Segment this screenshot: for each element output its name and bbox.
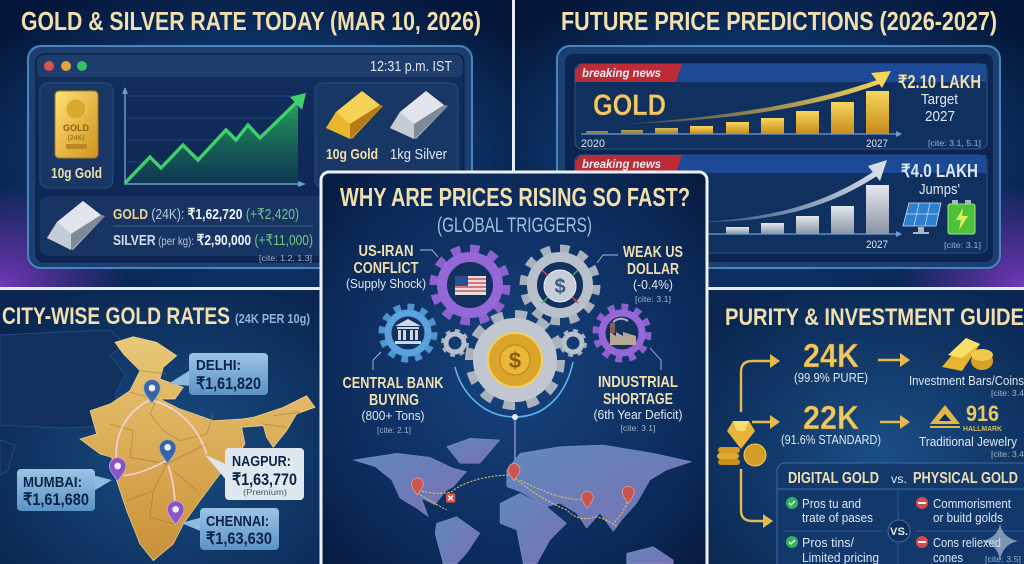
label: central bank buying: [342, 375, 444, 435]
citation: [cite: 1.2, 1.3]: [259, 254, 312, 263]
card: 10g gold bar: GOLD: [63, 123, 89, 133]
icon: gold bar and coins: [942, 338, 993, 371]
callout: Mumbai: MUMBAI:: [23, 474, 82, 491]
icon: factory: [610, 319, 636, 345]
digital gold pros: Pros tins/: [802, 535, 854, 550]
table header: [788, 470, 1018, 487]
dollar sign: $: [509, 348, 521, 373]
silver target: ₹4.0 LAKH: [901, 161, 978, 181]
gear: weak US dollar: [524, 249, 596, 321]
comparison table: [777, 463, 1024, 564]
label: industrial shortage: [594, 374, 682, 433]
gold forecast chart: [575, 64, 987, 150]
physical gold cons: or buitd golds: [933, 510, 1003, 525]
table header: vs.: [891, 472, 907, 486]
physical gold cons: [cite: 3.5]: [985, 555, 1021, 564]
silver ingot: [390, 91, 448, 139]
small gears: [443, 331, 585, 355]
label: US-Iran conflict: CONFLICT: [354, 260, 419, 277]
icon: battery: [948, 200, 975, 234]
physical gold cons: Commorisment: [933, 496, 1011, 511]
world map: [353, 438, 692, 564]
card: 10g gold bar: (24K): [67, 135, 85, 142]
label: industrial shortage: INDUSTRIAL: [598, 374, 678, 391]
panel: why are prices rising: [321, 172, 707, 564]
icon: 916 hallmark: HALLMARK: [963, 426, 1002, 433]
heading: why prices rising: WHY ARE PRICES RISING SO FAST?: [340, 182, 690, 212]
gear: US-Iran conflict: [434, 249, 506, 321]
card: gold and silver ingots: 1kg Silver: [390, 146, 447, 163]
heading: city rates: CITY-WISE GOLD RATES: [2, 303, 230, 330]
silver ingot: [47, 201, 105, 250]
trade routes: [418, 475, 628, 527]
callout: Delhi: [168, 353, 268, 395]
gold price row: GOLD (24K): ₹1,62,720 (+₹2,420): [113, 206, 299, 223]
icon: gold diamond and coins: [717, 421, 766, 466]
window control dots: [44, 61, 87, 71]
silver forecast chart: [cite: 3.1]: [944, 241, 981, 250]
panel: future price predictions: [513, 0, 1024, 287]
VS badge: [888, 520, 910, 542]
icon: 916 hallmark: 916: [966, 401, 999, 426]
subheading: global triggers: (GLOBAL TRIGGERS): [437, 214, 592, 237]
gold forecast chart: 2020: [581, 138, 605, 150]
label: weak US dollar: WEAK US: [623, 244, 683, 261]
investment bars label: [909, 373, 1024, 398]
purity: 22K: (91.6% STANDARD): [781, 432, 881, 447]
breaking news tag: [575, 64, 682, 82]
silver forecast chart: Jumps': [919, 181, 960, 198]
label: weak US dollar: DOLLAR: [627, 261, 679, 278]
digital gold pros: Pros tu and: [802, 496, 861, 511]
digital gold pros: [786, 496, 879, 564]
label: central bank buying: (800+ Tons): [362, 408, 424, 423]
label: central bank buying: CENTRAL BANK: [342, 375, 444, 392]
traditional jewelry label: [cite: 3.4: [991, 450, 1024, 459]
label: weak US dollar: [623, 244, 683, 304]
panel: gold and silver rate today: [0, 0, 513, 287]
label: US-Iran conflict: US-IRAN: [358, 243, 414, 260]
breaking news tag: [575, 155, 682, 173]
investment bars label: [cite: 3.4: [991, 389, 1024, 398]
physical gold cons: [916, 496, 1021, 564]
silver trend arrow: [700, 160, 887, 222]
callout: Nagpur: ₹1,63,770: [232, 470, 297, 489]
gold label: GOLD: [593, 89, 666, 122]
silver bars: [726, 185, 889, 234]
gear: industrial shortage: [596, 307, 648, 359]
purity: 22K: 22K: [803, 399, 859, 436]
label: weak US dollar: (-0.4%): [633, 277, 673, 292]
label: central bank buying: [cite: 2.1]: [377, 426, 411, 435]
label: industrial shortage: [cite: 3.1]: [620, 424, 656, 433]
gold ingot: [326, 91, 383, 139]
arrowheads: [763, 353, 910, 528]
disruption marker: [446, 493, 455, 503]
gold forecast chart: [cite: 3.1, 5.1]: [928, 139, 981, 148]
gold forecast chart: 2027: [866, 138, 888, 150]
label: industrial shortage: SHORTAGE: [603, 391, 673, 408]
callout: Chennai: CHENNAI:: [206, 513, 269, 530]
gear: central bank: [382, 307, 434, 359]
silver forecast chart: 2027: [866, 239, 888, 251]
callout: Nagpur: [205, 448, 304, 500]
gold trend arrow: [625, 71, 891, 124]
white dividers: [0, 0, 1024, 290]
digital gold pros: trate of pases: [802, 510, 873, 525]
panel: purity and investment guide: [707, 290, 1024, 564]
card: gold and silver ingots: 10g Gold: [326, 146, 378, 163]
silver price row: SILVER (per kg): ₹2,90,000 (+₹11,000): [113, 232, 313, 249]
map pins: [411, 464, 634, 508]
leader lines: [373, 250, 661, 370]
pin: Delhi: [144, 380, 160, 403]
gold branching arrows: [741, 360, 902, 521]
icon: bank building: [395, 319, 421, 344]
physical gold cons: Cons reliexed: [933, 535, 1001, 550]
callout: Mumbai: [17, 469, 112, 511]
icon: solar panel: [903, 203, 941, 234]
callout: Delhi: ₹1,61,820: [196, 374, 261, 393]
neighbouring countries: [0, 330, 130, 475]
predictions window: [557, 46, 1000, 268]
silver forecast chart: [575, 155, 987, 253]
heading: rate today: GOLD & SILVER RATE TODAY (MAR 10, 2026): [21, 6, 481, 36]
timestamp: 12:31 p.m. IST: [370, 58, 452, 75]
breaking news tag: breaking news: [582, 66, 661, 80]
label: US-Iran conflict: [346, 243, 426, 291]
gold bars: [586, 91, 889, 134]
gold forecast chart: 2027: [925, 108, 955, 125]
card: 10g gold bar: [40, 83, 113, 188]
gear: central gold coin: [470, 315, 560, 405]
gold forecast chart: Target: [921, 91, 959, 108]
label: US-Iran conflict: (Supply Shock): [346, 276, 426, 291]
callout: Nagpur: NAGPUR:: [232, 453, 291, 470]
callout: Mumbai: ₹1,61,680: [23, 490, 89, 509]
gold target: ₹2.10 LAKH: [898, 72, 981, 92]
pin: Nagpur: [159, 440, 176, 463]
card: gold and silver ingots: [315, 83, 458, 188]
panel: city-wise gold rates: [0, 290, 321, 564]
breaking news tag: breaking news: [582, 157, 661, 171]
purity: 24K: 24K: [803, 337, 859, 374]
callout: Nagpur: (Premium): [243, 488, 287, 497]
line chart: rising price: [122, 87, 306, 187]
label: central bank buying: BUYING: [369, 392, 419, 409]
purity: 24K: [794, 337, 868, 385]
table header: DIGITAL GOLD: [788, 470, 879, 487]
sparkle watermark: [982, 524, 1018, 560]
pin: Mumbai: [109, 458, 126, 481]
traditional jewelry label: Traditional Jewelry: [919, 434, 1017, 449]
VS badge: VS.: [890, 526, 908, 538]
purity: 24K: (99.9% PURE): [794, 370, 868, 385]
callout: Delhi: DELHI:: [196, 357, 241, 374]
dashboard window: [28, 46, 472, 268]
label: industrial shortage: (6th Year Deficit): [594, 407, 682, 422]
pin: Chennai: [167, 501, 184, 525]
icon: US flag: [455, 276, 486, 295]
card: 10g gold bar: 10g Gold: [51, 165, 102, 182]
icon: dollar coin: $: [554, 276, 566, 298]
callout: Chennai: [181, 508, 279, 550]
glowing arc connector: [455, 362, 573, 470]
map of India: [80, 337, 315, 561]
callout: Chennai: ₹1,63,630: [206, 529, 272, 548]
price strip: [40, 196, 460, 263]
label: weak US dollar: [cite: 3.1]: [635, 295, 671, 304]
heading: city rates: (24K PER 10g): [235, 311, 310, 326]
purity: 22K: [781, 399, 881, 447]
traditional jewelry label: [919, 434, 1024, 459]
icon: 916 hallmark: [930, 401, 1002, 433]
